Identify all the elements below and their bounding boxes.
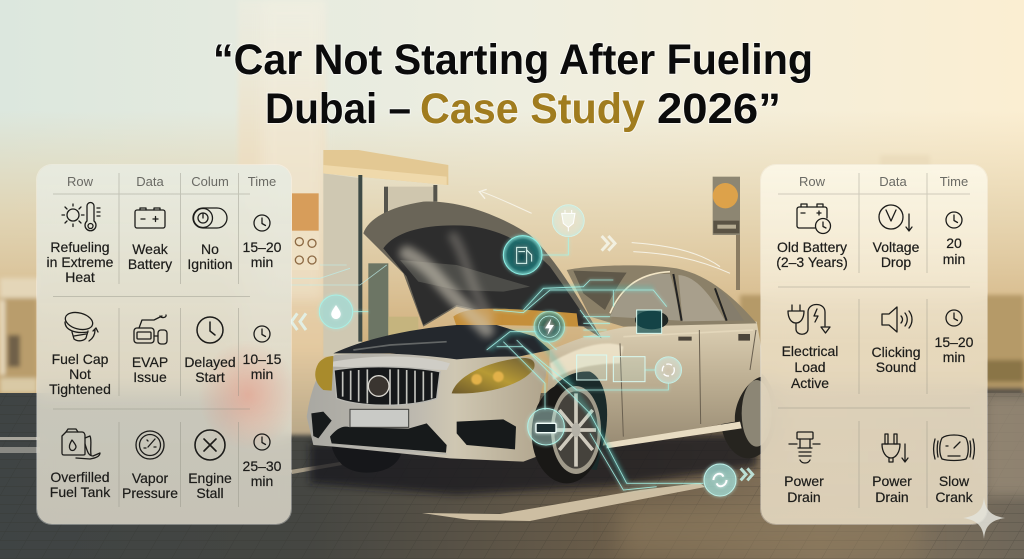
text: old battery <box>776 239 848 270</box>
text: power drain <box>784 473 824 505</box>
icon: clock <box>254 326 270 342</box>
steam <box>407 237 490 330</box>
open bonnet <box>363 202 602 338</box>
icon: plug with arrow <box>882 434 908 462</box>
text: 10-15 min: min <box>251 366 273 382</box>
text: electrical load active: Electrical <box>782 343 838 359</box>
table header <box>67 174 276 189</box>
HUD icon: lightning <box>534 311 565 342</box>
icon: bulb fuse <box>789 432 820 463</box>
text: engine stall: Stall <box>196 485 224 501</box>
icon: ignition toggle <box>193 208 227 228</box>
text: clicking sound <box>871 344 921 375</box>
text: overfilled fuel tank: Fuel Tank <box>50 484 111 500</box>
text: weak battery <box>128 241 172 272</box>
text: weak battery: Battery <box>128 256 172 272</box>
HUD icon: fuel pump <box>503 236 542 274</box>
HUD glow haze <box>490 288 653 483</box>
text: overfilled fuel tank <box>50 469 111 500</box>
HUD icon: fuel drop <box>319 295 353 328</box>
road marking <box>290 462 705 521</box>
text: overfilled fuel tank: Overfilled <box>50 469 110 485</box>
text: 25-30 min: min <box>251 473 273 489</box>
text: slow crank: Slow <box>939 473 970 489</box>
left headlight <box>315 356 333 391</box>
ground <box>0 393 1024 559</box>
icon: sparkle <box>964 498 1004 538</box>
icon: pressure gauge <box>136 431 164 459</box>
brand sign <box>713 177 740 290</box>
HUD circuit boxes <box>577 310 662 382</box>
table header: Row <box>67 174 94 189</box>
text: power drain <box>872 473 912 505</box>
text: 10-15 min <box>243 351 282 382</box>
text: 15-20 min: min <box>943 349 965 365</box>
icon: speaker <box>882 307 912 332</box>
text: voltage drop: Voltage <box>873 239 920 255</box>
text: 15-20 min <box>935 334 974 365</box>
text: refueling in extreme heat: in Extreme <box>47 254 114 270</box>
rear wheel <box>720 368 777 458</box>
table header: Time <box>940 174 968 189</box>
text: delayed start: Delayed <box>184 354 236 370</box>
icon: stall cross <box>195 430 225 460</box>
pillar <box>238 0 326 435</box>
icon: overfilled tank <box>62 429 100 459</box>
distant buildings right <box>740 155 1024 396</box>
text: fuel cap not tightened: Not <box>69 366 91 382</box>
text: vapor pressure <box>122 470 178 501</box>
car front <box>307 353 546 462</box>
icon: plug with bolt <box>788 304 830 334</box>
text: delayed start: Start <box>195 369 225 385</box>
text: no ignition <box>187 241 233 272</box>
text: engine stall <box>188 470 232 501</box>
licence plate <box>350 409 409 427</box>
distant buildings left <box>0 278 40 393</box>
text: clicking sound: Sound <box>876 359 916 375</box>
chevrons <box>291 236 753 480</box>
text: power drain: Power <box>784 473 824 489</box>
text: power drain: Power <box>872 473 912 489</box>
car shadow <box>310 433 757 495</box>
car roof and windows <box>567 265 757 341</box>
text: 10-15 min: 10–15 <box>243 351 282 367</box>
table header: Data <box>136 174 164 189</box>
car side <box>543 322 762 455</box>
text: evap issue: EVAP <box>132 354 168 370</box>
text: fuel cap not tightened <box>49 351 111 397</box>
front-left tyre <box>332 447 403 473</box>
text: power drain: Drain <box>787 489 821 505</box>
text: electrical load active: Active <box>791 375 829 391</box>
canopy and pump <box>323 150 448 357</box>
sky <box>0 0 1024 400</box>
text: refueling in extreme heat: Heat <box>65 269 95 285</box>
icon: clock <box>946 212 962 228</box>
text: 15-20 min: min <box>251 254 273 270</box>
text: slow crank <box>935 473 974 505</box>
title: Dubai – <box>265 85 411 133</box>
text: 20 min: 20 <box>946 235 962 251</box>
text: fuel cap not tightened: Fuel Cap <box>52 351 109 367</box>
HUD icon: gear link <box>655 357 682 383</box>
HUD left trace <box>290 265 387 285</box>
text: evap issue <box>132 354 168 385</box>
text: vapor pressure: Vapor <box>132 470 168 486</box>
text: voltage drop <box>873 239 920 270</box>
right headlight <box>452 358 535 394</box>
text: evap issue: Issue <box>133 369 167 385</box>
text: 15-20 min <box>243 239 282 270</box>
text: electrical load active <box>782 343 838 391</box>
table header: Row <box>799 174 826 189</box>
flow arrows <box>479 189 730 273</box>
text: 25-30 min: 25–30 <box>243 458 282 474</box>
text: delayed start <box>184 354 236 385</box>
title: “Car Not Starting After Fueling <box>213 36 813 84</box>
icon: sun and thermometer <box>62 203 100 231</box>
text: 25-30 min <box>243 458 282 489</box>
text: clicking sound: Clicking <box>871 344 921 360</box>
icon: large clock <box>197 317 223 343</box>
table header: Colum <box>191 174 229 189</box>
fuel station and car drawn in detail coordinates <box>290 150 777 496</box>
pump signage <box>292 193 319 270</box>
text: 15-20 min: 15–20 <box>243 239 282 255</box>
HUD icon: plug <box>552 205 584 237</box>
icon: clock <box>946 310 962 326</box>
text: no ignition: Ignition <box>187 256 233 272</box>
text: 20 min: min <box>943 251 965 267</box>
grille <box>334 367 440 405</box>
table header <box>799 174 968 189</box>
text: old battery: Old Battery <box>777 239 847 255</box>
text: voltage drop: Drop <box>881 254 911 270</box>
front wheel <box>532 372 607 483</box>
HUD icon: engine <box>528 408 564 445</box>
icon: voltage drop <box>879 205 912 231</box>
table header: Data <box>879 174 907 189</box>
title <box>213 36 813 133</box>
text: no ignition: No <box>201 241 219 257</box>
text: vapor pressure: Pressure <box>122 485 178 501</box>
title: 2026” <box>657 85 781 133</box>
text: engine stall: Engine <box>188 470 232 486</box>
icon: clock <box>254 215 270 231</box>
title: Case Study <box>420 85 645 133</box>
HUD lines <box>353 237 703 490</box>
icon: slow crank gauge <box>934 435 974 460</box>
text: old battery: (2–3 Years) <box>776 254 848 270</box>
text: 15-20 min: 15–20 <box>935 334 974 350</box>
text: slow crank: Crank <box>935 489 974 505</box>
lower intakes <box>311 412 516 453</box>
text: 20 min <box>943 235 965 267</box>
text: refueling in extreme heat: Refueling <box>50 239 110 255</box>
text: electrical load active: Load <box>794 359 826 375</box>
engine bay glow <box>453 309 578 327</box>
text: refueling in extreme heat <box>47 239 114 285</box>
icon: battery <box>135 208 165 228</box>
panel: right causes table <box>761 165 987 524</box>
table header: Time <box>248 174 276 189</box>
icon: fuel cap <box>63 310 98 341</box>
panel: left causes table <box>37 165 291 524</box>
icon: evap system <box>134 315 167 344</box>
HUD icon: broken link <box>704 464 736 496</box>
text: power drain: Drain <box>875 489 909 505</box>
icon: clock <box>254 434 270 450</box>
icon: old battery with clock <box>797 204 830 234</box>
text: weak battery: Weak <box>132 241 169 257</box>
text: fuel cap not tightened: Tightened <box>49 381 111 397</box>
